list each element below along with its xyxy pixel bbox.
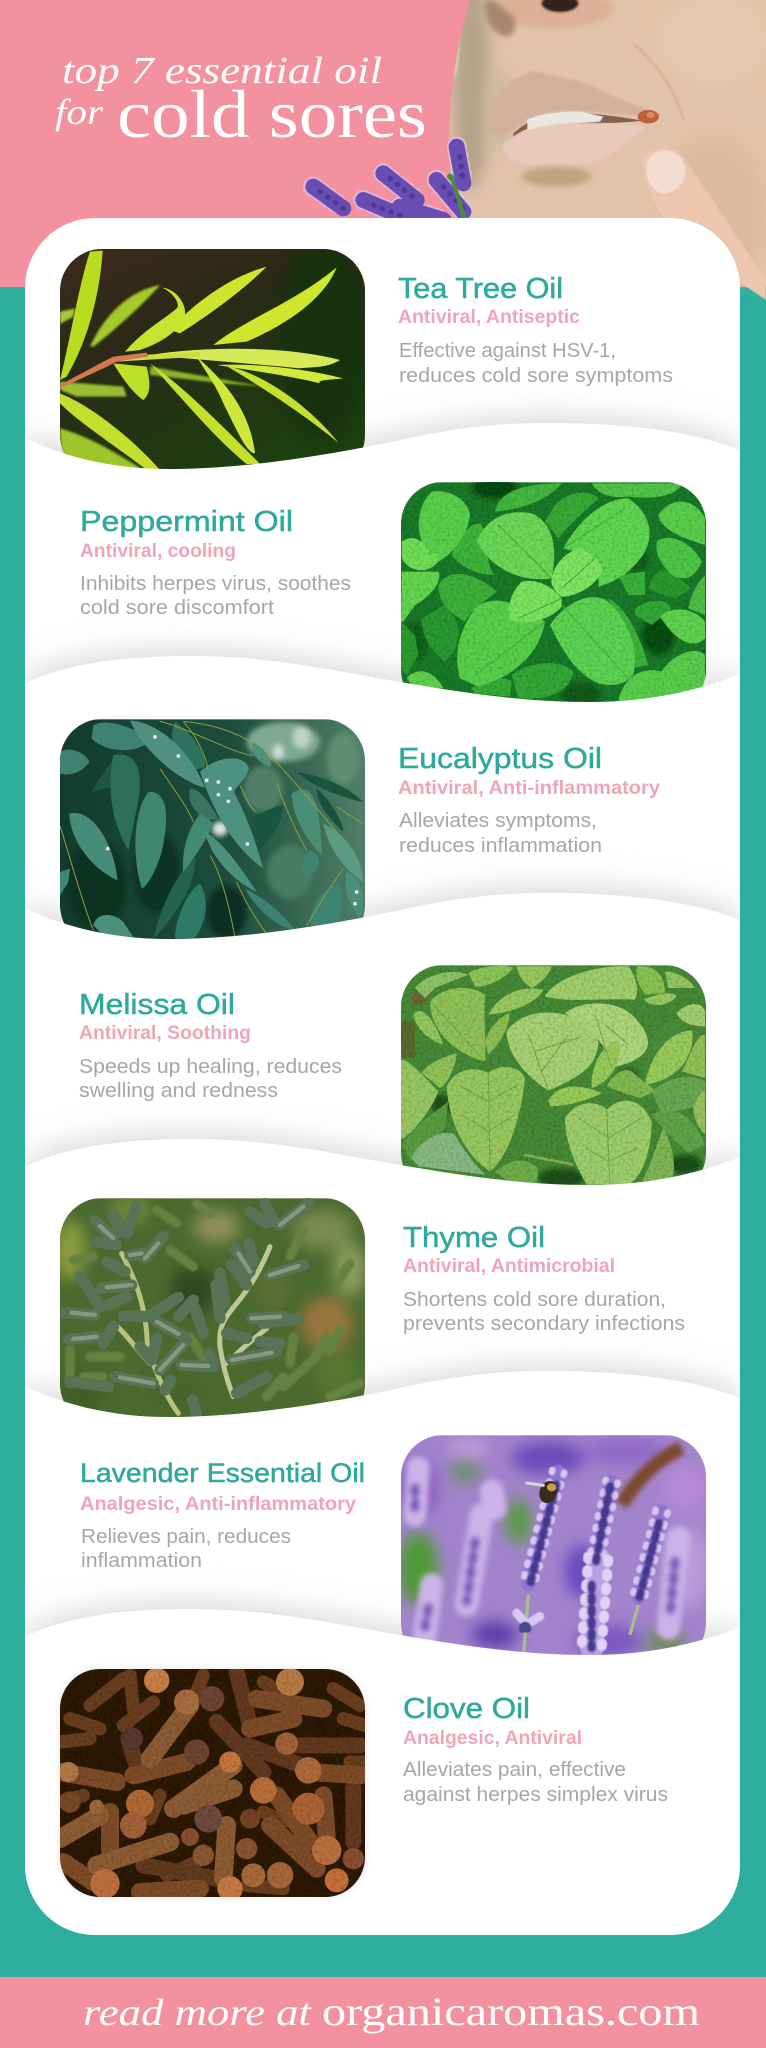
wave divider 5 (25, 1371, 740, 1640)
properties: Antiviral, Antimicrobial (403, 1255, 615, 1277)
oil name: Eucalyptus Oil (398, 743, 602, 775)
photo: lavender field with bee (398, 1435, 708, 1665)
oil name: Thyme Oil (403, 1222, 545, 1254)
oil name: Clove Oil (403, 1693, 530, 1725)
properties: Antiviral, Anti-inflammatory (398, 777, 660, 799)
title line: top 7 essential oil: top 7 essential oil (62, 50, 382, 92)
description (399, 812, 601, 852)
description: Effective against HSV-1, (399, 339, 616, 362)
panel: white card with oils (25, 218, 740, 1953)
description: swelling and redness (79, 1079, 278, 1102)
wave divider 6 (25, 1609, 740, 1953)
description (79, 1055, 342, 1102)
photo: melissa leaves (401, 965, 706, 1195)
photo: woman's lips with cold sore and fingertip (447, 0, 766, 300)
title word: for: for (55, 92, 104, 132)
photo: tea tree sprig (60, 240, 367, 477)
description: Speeds up healing, reduces (79, 1055, 342, 1078)
text block: Tea Tree Oil (398, 273, 673, 387)
text block: Peppermint Oil (80, 506, 351, 619)
text block: Melissa Oil (79, 989, 342, 1102)
wave divider 2 (25, 656, 740, 924)
description (403, 1288, 685, 1335)
wave divider 1 (25, 423, 740, 686)
photo: peppermint leaves (401, 478, 706, 712)
photo: dried cloves (58, 1668, 365, 1901)
properties: Analgesic, Anti-inflammatory (80, 1493, 356, 1515)
oil name: Lavender Essential Oil (80, 1458, 365, 1488)
text block: Clove Oil (403, 1693, 668, 1806)
text block: Eucalyptus Oil (398, 743, 660, 857)
description (82, 1528, 290, 1567)
description: cold sore discomfort (80, 596, 274, 619)
properties: Analgesic, Antiviral (403, 1727, 582, 1749)
description: Alleviates pain, effective (403, 1758, 626, 1781)
wave divider 3 (25, 893, 740, 1170)
description: against herpes simplex virus (403, 1783, 668, 1806)
footer: organicaromas.com: organicaromas.com (322, 1989, 700, 2034)
description: Inhibits herpes virus, soothes (80, 572, 351, 595)
oil name: Tea Tree Oil (398, 273, 563, 305)
description: reduces inflammation (399, 834, 602, 857)
oil name: Peppermint Oil (80, 506, 293, 538)
text block: Lavender Essential Oil (80, 1458, 365, 1572)
photo: thyme sprigs (53, 1197, 367, 1426)
header band (0, 0, 766, 287)
footer band (0, 1977, 766, 2048)
wave divider 4 (25, 1139, 740, 1401)
footer: read more at: read more at (83, 1992, 313, 2034)
description (399, 339, 673, 387)
illustration: lavender sprigs (313, 147, 465, 220)
properties: Antiviral, cooling (80, 540, 236, 562)
properties: Antiviral, Soothing (79, 1022, 251, 1044)
description: Relieves pain, reduces (81, 1525, 291, 1548)
description (403, 1758, 668, 1806)
description (80, 575, 350, 614)
description: prevents secondary infections (403, 1312, 685, 1335)
oil name: Melissa Oil (79, 989, 235, 1021)
text block: Thyme Oil (403, 1222, 685, 1335)
footer text (83, 1989, 700, 2034)
photo: eucalyptus branches (60, 719, 365, 947)
description: inflammation (81, 1549, 202, 1572)
description: Shortens cold sore duration, (403, 1288, 666, 1311)
title (55, 50, 427, 152)
description: Alleviates symptoms, (399, 809, 597, 832)
description: reduces cold sore symptoms (399, 364, 673, 387)
properties: Antiviral, Antiseptic (398, 306, 580, 328)
title line: cold sores: cold sores (117, 76, 427, 152)
